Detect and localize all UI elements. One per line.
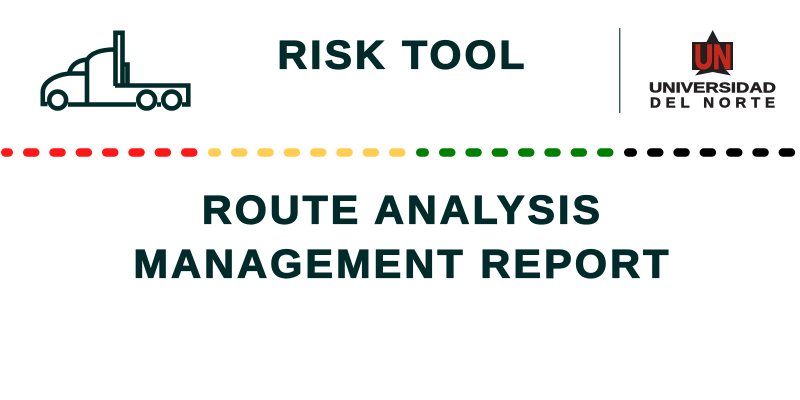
logo wordmark line 1: UNIVERSIDAD — [649, 80, 776, 96]
icon: truck — [43, 33, 188, 108]
title: risk tool: RISK TOOL — [278, 34, 528, 78]
black dashes — [624, 148, 795, 157]
logo UN letters: UN — [694, 38, 732, 76]
heading line 2: MANAGEMENT REPORT — [134, 243, 672, 287]
logo wordmark line 2: DEL NORTE — [650, 94, 775, 112]
yellow dashes — [208, 148, 406, 157]
green dashes — [416, 148, 614, 157]
red dashes — [1, 148, 198, 157]
dashed risk line — [1, 148, 795, 157]
heading line 1: ROUTE ANALYSIS — [202, 189, 603, 233]
logo star — [692, 30, 733, 76]
logo: Universidad del Norte — [649, 30, 776, 112]
vertical divider — [619, 28, 620, 113]
